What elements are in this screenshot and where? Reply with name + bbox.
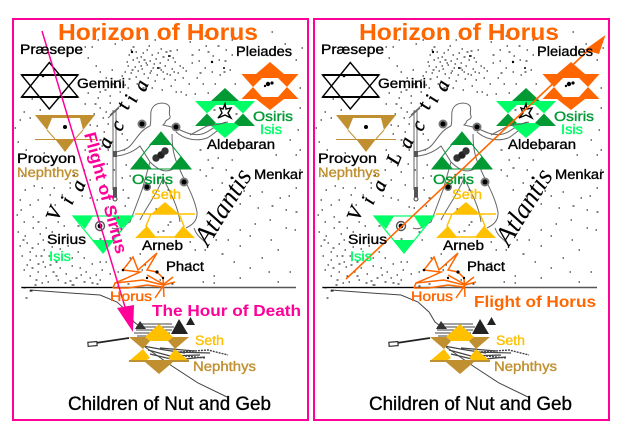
star labels: Aldebaran: [508, 137, 576, 152]
star labels: Præsepe: [321, 42, 384, 57]
via lactea lettering: [42, 77, 154, 224]
star labels: Menkar: [555, 167, 605, 182]
via lactea lettering: a: [129, 77, 154, 95]
star labels: Menkar: [254, 167, 304, 182]
via lactea lettering: a: [430, 77, 455, 95]
star labels: Præsepe: [20, 42, 83, 57]
star labels: Phact: [467, 259, 505, 274]
star labels: Procyon: [318, 151, 377, 166]
star labels: [318, 42, 605, 374]
via lactea lettering: V: [343, 201, 369, 224]
star labels: Nephthys: [494, 359, 557, 374]
star labels: Horus: [110, 289, 152, 304]
label: Flight of Sirius: Flight of Sirius: [80, 130, 131, 256]
star labels: Osiris: [132, 172, 173, 187]
star labels: Seth: [496, 333, 525, 348]
star labels: Osiris: [253, 109, 293, 124]
star labels: Seth: [195, 333, 224, 348]
star labels: [17, 42, 304, 374]
via lactea lettering: t: [413, 99, 436, 112]
star labels: Pleiades: [537, 44, 593, 59]
via lactea lettering: c: [407, 117, 430, 134]
star labels: Arneb: [443, 238, 484, 253]
star labels: Nephthys: [17, 165, 79, 180]
caption: Children of Nut and Geb: [369, 394, 572, 415]
via lactea lettering: a: [66, 177, 91, 195]
star labels: Isis: [350, 249, 372, 264]
panel: left Flight of Sirius: [13, 19, 308, 420]
star labels: Pleiades: [236, 44, 292, 59]
star labels: Isis: [561, 122, 583, 137]
via lactea lettering: a: [93, 134, 118, 152]
via lactea lettering: a: [394, 134, 419, 152]
star labels: Horus: [411, 289, 453, 304]
Atlantis lettering: Atlantis: [187, 163, 258, 252]
via lactea lettering: i: [120, 92, 143, 105]
star labels: Osiris: [554, 109, 594, 124]
via lactea lettering: c: [106, 117, 129, 134]
star labels: Seth: [452, 187, 482, 202]
caption: Children of Nut and Geb: [68, 394, 271, 415]
star labels: Gemini: [77, 76, 125, 91]
panel: right Flight of Horus: [314, 19, 609, 420]
constellation line: Flight of Sirius: [42, 31, 134, 332]
label: The Hour of Death: The Hour of Death: [152, 303, 301, 320]
star labels: Nephthys: [318, 165, 380, 180]
star labels: Osiris: [433, 172, 474, 187]
star labels: Isis: [49, 249, 71, 264]
star labels: Sirius: [348, 232, 387, 247]
star map artwork: [316, 31, 604, 397]
constellation line: Flight of Horus: [346, 35, 606, 279]
star labels: Nephthys: [193, 359, 256, 374]
via lactea lettering: a: [367, 177, 392, 195]
via lactea lettering: t: [112, 99, 135, 112]
star labels: Phact: [166, 259, 204, 274]
Atlantis lettering: Atlantis: [488, 163, 559, 252]
title: Horizon of Horus: [359, 19, 559, 45]
star labels: Isis: [260, 122, 282, 137]
star labels: Sirius: [47, 232, 86, 247]
star map artwork: [15, 31, 302, 397]
via lactea lettering: V: [42, 201, 68, 224]
star labels: Procyon: [17, 151, 76, 166]
star labels: Gemini: [378, 76, 426, 91]
star labels: Aldebaran: [207, 137, 275, 152]
via lactea lettering: [343, 77, 455, 224]
star labels: Arneb: [142, 238, 183, 253]
via lactea lettering: i: [357, 194, 380, 207]
star labels: Seth: [151, 187, 181, 202]
via lactea lettering: i: [56, 194, 79, 207]
label: Flight of Horus: Flight of Horus: [474, 294, 596, 311]
via lactea lettering: L: [382, 149, 407, 169]
title: Horizon of Horus: [58, 19, 258, 45]
via lactea lettering: i: [421, 92, 444, 105]
